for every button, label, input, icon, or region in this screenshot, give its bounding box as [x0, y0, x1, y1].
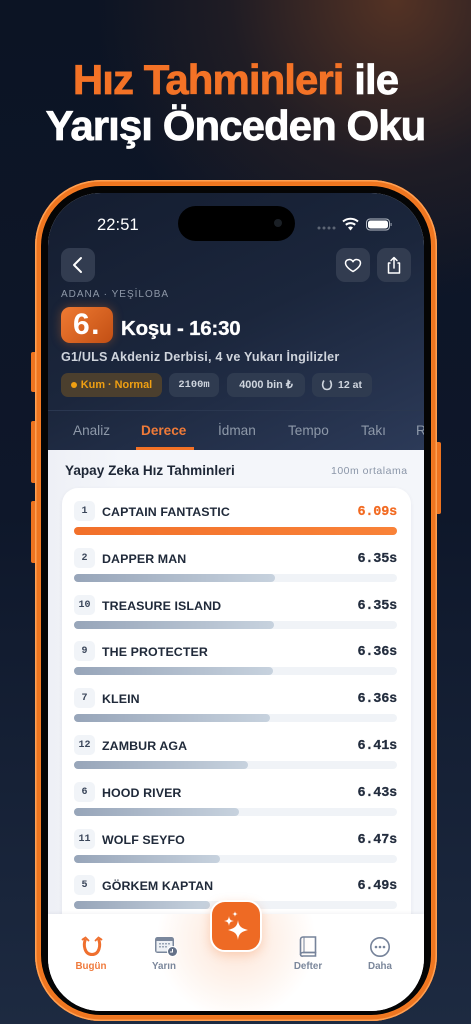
content — [48, 450, 424, 920]
phone: side buttons — [31, 352, 441, 563]
active tab underline — [136, 447, 194, 450]
row 6: ZAMBUR AGA — [102, 739, 187, 753]
row 7: 6.43s — [357, 786, 397, 801]
row 9: GÖRKEM KAPTAN — [102, 879, 213, 893]
row 4: 9 — [81, 646, 88, 657]
row 9: 5 — [81, 880, 88, 891]
row 3: TREASURE ISLAND — [102, 599, 221, 613]
status bar time: 22:51 — [97, 216, 139, 234]
chip: track: Kum · Normal — [81, 379, 152, 391]
location label: ADANA · YEŞİLOBA — [61, 289, 169, 300]
row 4: 6.36s — [357, 645, 397, 660]
nav: Defter label: Defter — [294, 961, 322, 972]
chip: runners: 12 at — [338, 379, 362, 391]
row 8: 6.47s — [357, 833, 397, 848]
row 5: 7 — [81, 693, 88, 704]
phone frame — [35, 180, 437, 1021]
row 7 — [74, 782, 397, 816]
favourite button — [336, 248, 370, 282]
phone bezel — [41, 186, 431, 1015]
row 6: 6.41s — [357, 739, 397, 754]
row 1 — [74, 501, 397, 535]
row 7: HOOD RIVER — [102, 786, 181, 800]
row 9 — [74, 875, 397, 909]
tab: Takı: Takı — [361, 423, 386, 438]
chip: prize: 4000 bin ₺ — [239, 379, 293, 391]
row 1: 1 — [81, 506, 88, 517]
tab: Derece active: Derece — [141, 423, 186, 438]
row 8: WOLF SEYFO — [102, 833, 185, 847]
chip: distance — [169, 373, 219, 397]
row 6 — [74, 735, 397, 769]
row 5: KLEIN — [102, 692, 140, 706]
chip: prize — [227, 373, 305, 397]
nav: Daha icon — [370, 937, 390, 957]
row 7: 6 — [81, 787, 88, 798]
nav: Bugün label: Bugün — [75, 961, 106, 972]
title: Yarışı Önceden Oku — [46, 102, 425, 149]
nav: Daha label: Daha — [368, 961, 392, 972]
tab: İdman: İdman — [218, 423, 256, 438]
race number badge: 6. — [73, 308, 101, 341]
centre AI button — [210, 900, 262, 952]
chip: track — [61, 373, 162, 397]
chip: runners — [312, 373, 372, 397]
section heading: Yapay Zeka Hız Tahminleri — [65, 463, 235, 478]
centre button glow — [156, 860, 316, 1020]
chip: distance: 2100m — [178, 379, 210, 391]
share button — [377, 248, 411, 282]
status icons — [318, 218, 392, 230]
dynamic island — [178, 206, 295, 241]
race subtitle: G1/ULS Akdeniz Derbisi, 4 ve Yukarı İngilizler — [61, 350, 339, 364]
bottom nav — [48, 914, 424, 1011]
row 5 — [74, 688, 397, 722]
phone screen — [48, 193, 424, 1011]
header background — [48, 193, 424, 450]
nav: Yarın label: Yarın — [152, 961, 176, 972]
row 3: 10 — [78, 600, 90, 611]
section note: 100m ortalama — [331, 465, 408, 477]
row 1: 6.09s — [357, 505, 397, 520]
row 3 — [74, 595, 397, 629]
row 6: 12 — [78, 740, 90, 751]
list card — [62, 488, 411, 928]
race title: Koşu - 16:30 — [121, 317, 240, 340]
row 2: DAPPER MAN — [102, 552, 186, 566]
row 5: 6.36s — [357, 692, 397, 707]
row 4 — [74, 641, 397, 675]
nav: Yarın icon — [155, 937, 178, 956]
row 4: THE PROTECTER — [102, 645, 208, 659]
row 3: 6.35s — [357, 599, 397, 614]
title: Hız Tahminleri ile — [73, 56, 398, 103]
title — [46, 56, 425, 149]
nav: Bugün icon — [82, 936, 102, 956]
row 8: 11 — [78, 834, 90, 845]
row 1: CAPTAIN FANTASTIC — [102, 505, 230, 519]
row 2: 6.35s — [357, 552, 397, 567]
race number badge — [61, 307, 113, 343]
tab: Tempo: Tempo — [288, 423, 329, 438]
tabs — [48, 410, 424, 450]
row 9: 6.49s — [357, 879, 397, 894]
nav: Defter icon — [300, 936, 316, 957]
tab: Analiz: Analiz — [73, 423, 110, 438]
back button — [61, 248, 95, 282]
row 8 — [74, 829, 397, 863]
row 2: 2 — [81, 553, 88, 564]
row 2 — [74, 548, 397, 582]
